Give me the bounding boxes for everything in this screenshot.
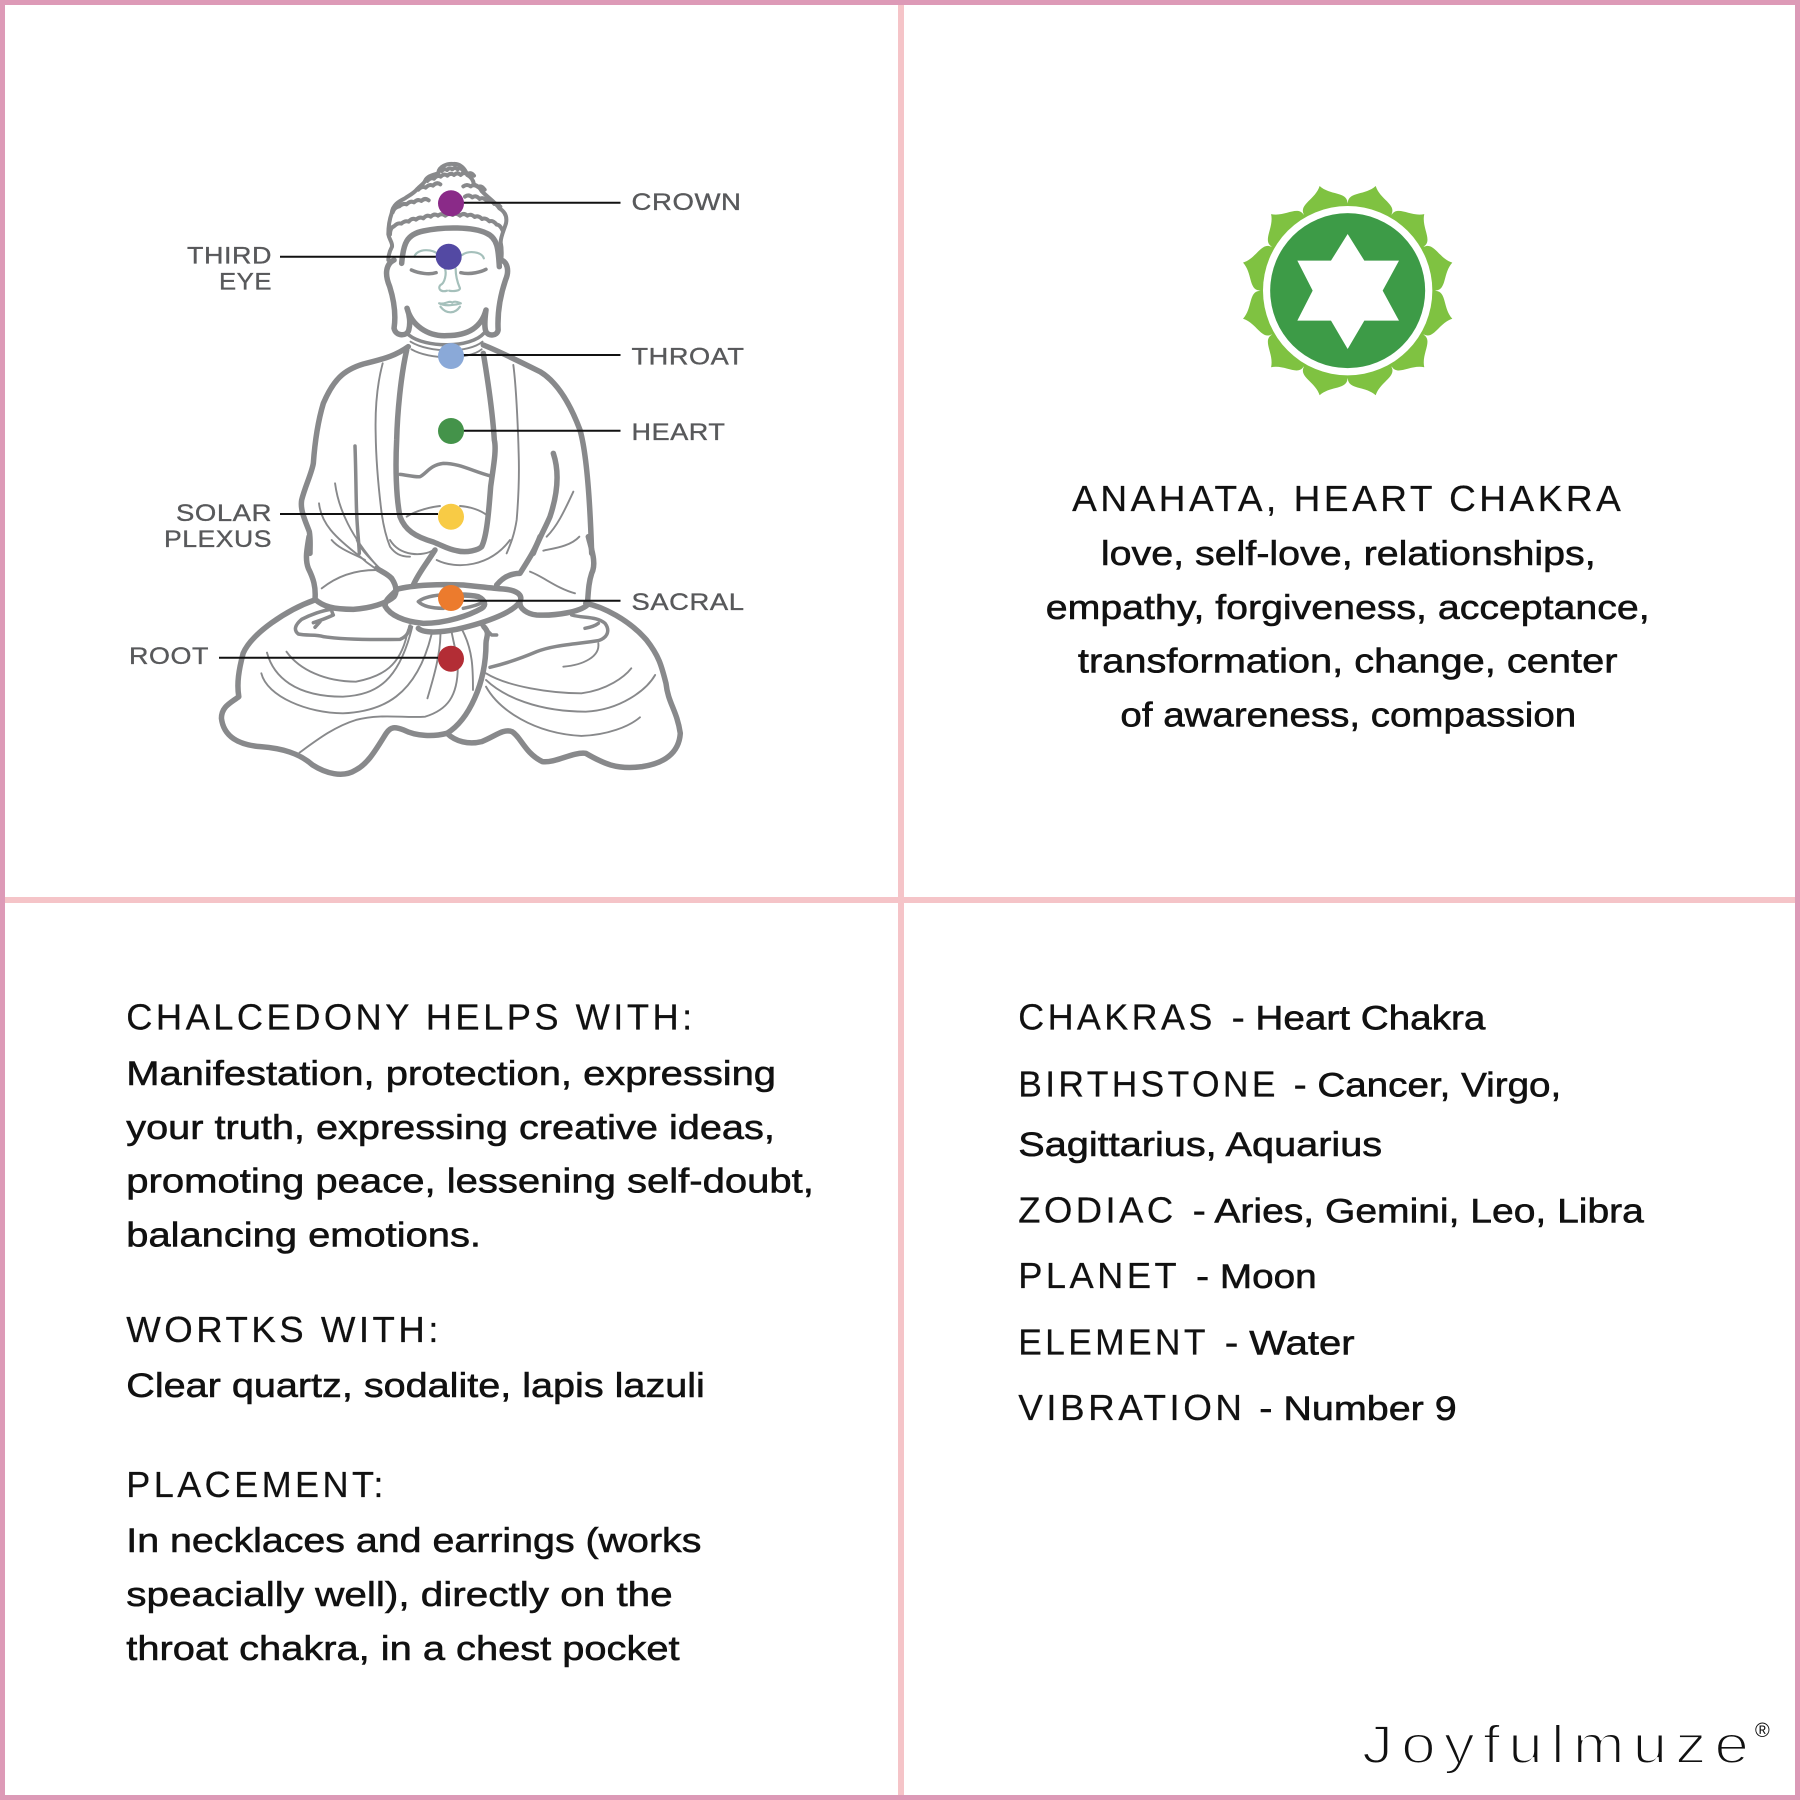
text: helps with: [126, 997, 814, 1255]
text: vibration: - Number 9: [1259, 1390, 1457, 1428]
text: helps with: Manifestation, protection, expressing: [126, 1055, 776, 1093]
chakra labels: SOLAR: [176, 500, 272, 527]
logo: Joyfulmuze: Joyfulmuze: [1362, 1715, 1757, 1775]
leader lines: [219, 203, 620, 658]
text: helps with: CHALCEDONY HELPS WITH:: [126, 997, 696, 1038]
text: zodiac: - Aries, Gemini, Leo, Libra: [1193, 1193, 1645, 1231]
text: element: - Water: [1225, 1325, 1355, 1363]
text: placement: speacially well), directly on the: [126, 1576, 673, 1614]
text: works with: [126, 1309, 705, 1405]
chakra labels: THROAT: [632, 344, 744, 370]
text: placement: PLACEMENT:: [126, 1464, 387, 1505]
text: placement: In necklaces and earrings (works: [126, 1522, 701, 1560]
text: vibration: [1018, 1387, 1457, 1428]
text: anahata description: ANAHATA, HEART CHAKRA: [1072, 478, 1624, 519]
text: element: [1018, 1322, 1355, 1363]
text: works with: Clear quartz, sodalite, lapis lazuli: [126, 1367, 705, 1405]
text: planet: - Moon: [1196, 1258, 1317, 1296]
panel: chakra figure: [129, 164, 744, 774]
text: placement: [126, 1464, 701, 1668]
text: helps with: promoting peace, lessening self-doubt,: [126, 1163, 814, 1201]
chakra labels: THIRD: [187, 242, 272, 270]
text: helps with: your truth, expressing creative ideas,: [126, 1109, 775, 1147]
text: anahata description: transformation, change, center: [1078, 643, 1617, 681]
chakra labels: ROOT: [129, 643, 209, 670]
text: planet: [1018, 1255, 1317, 1296]
text: vibration: VIBRATION: [1018, 1387, 1246, 1428]
text: anahata description: love, self-love, relationships,: [1101, 535, 1596, 573]
text: element: ELEMENT: [1018, 1322, 1209, 1363]
text: works with: WORTKS WITH:: [126, 1309, 442, 1350]
text: planet: PLANET: [1018, 1255, 1180, 1296]
text: chakras: - Heart Chakra: [1232, 1000, 1486, 1038]
chakra dots: [436, 190, 464, 672]
text: zodiac: ZODIAC: [1018, 1190, 1177, 1231]
text: birthstone: - Cancer, Virgo,: [1294, 1066, 1561, 1104]
text: anahata description: [1046, 478, 1650, 735]
chakra labels: HEART: [632, 419, 726, 446]
chakra labels: SACRAL: [632, 589, 744, 616]
chakra labels: EYE: [219, 268, 272, 296]
chakra labels: [129, 189, 744, 670]
panel: chalcedony uses: [126, 997, 814, 1668]
text: placement: throat chakra, in a chest pocket: [126, 1630, 680, 1668]
text: birthstone: Sagittarius, Aquarius: [1018, 1126, 1382, 1164]
text: birthstone: BIRTHSTONE: [1018, 1063, 1279, 1104]
illustration: seated Buddha line drawing: [221, 164, 680, 774]
chakra labels: PLEXUS: [164, 526, 272, 553]
text: birthstone: [1018, 1063, 1561, 1164]
panel: correspondences: [1018, 997, 1645, 1428]
text: chakras: [1018, 997, 1486, 1038]
text: helps with: balancing emotions.: [126, 1217, 481, 1255]
panel: heart chakra: [1046, 180, 1650, 735]
text: chakras: CHAKRAS: [1018, 997, 1216, 1038]
text: anahata description: empathy, forgiveness, acceptance,: [1046, 589, 1650, 627]
logo: Joyfulmuze: ®: [1755, 1720, 1770, 1742]
icon: anahata lotus symbol: [1237, 180, 1458, 401]
text: anahata description: of awareness, compassion: [1120, 697, 1576, 735]
chakra labels: CROWN: [632, 189, 742, 216]
text: zodiac: [1018, 1190, 1645, 1231]
